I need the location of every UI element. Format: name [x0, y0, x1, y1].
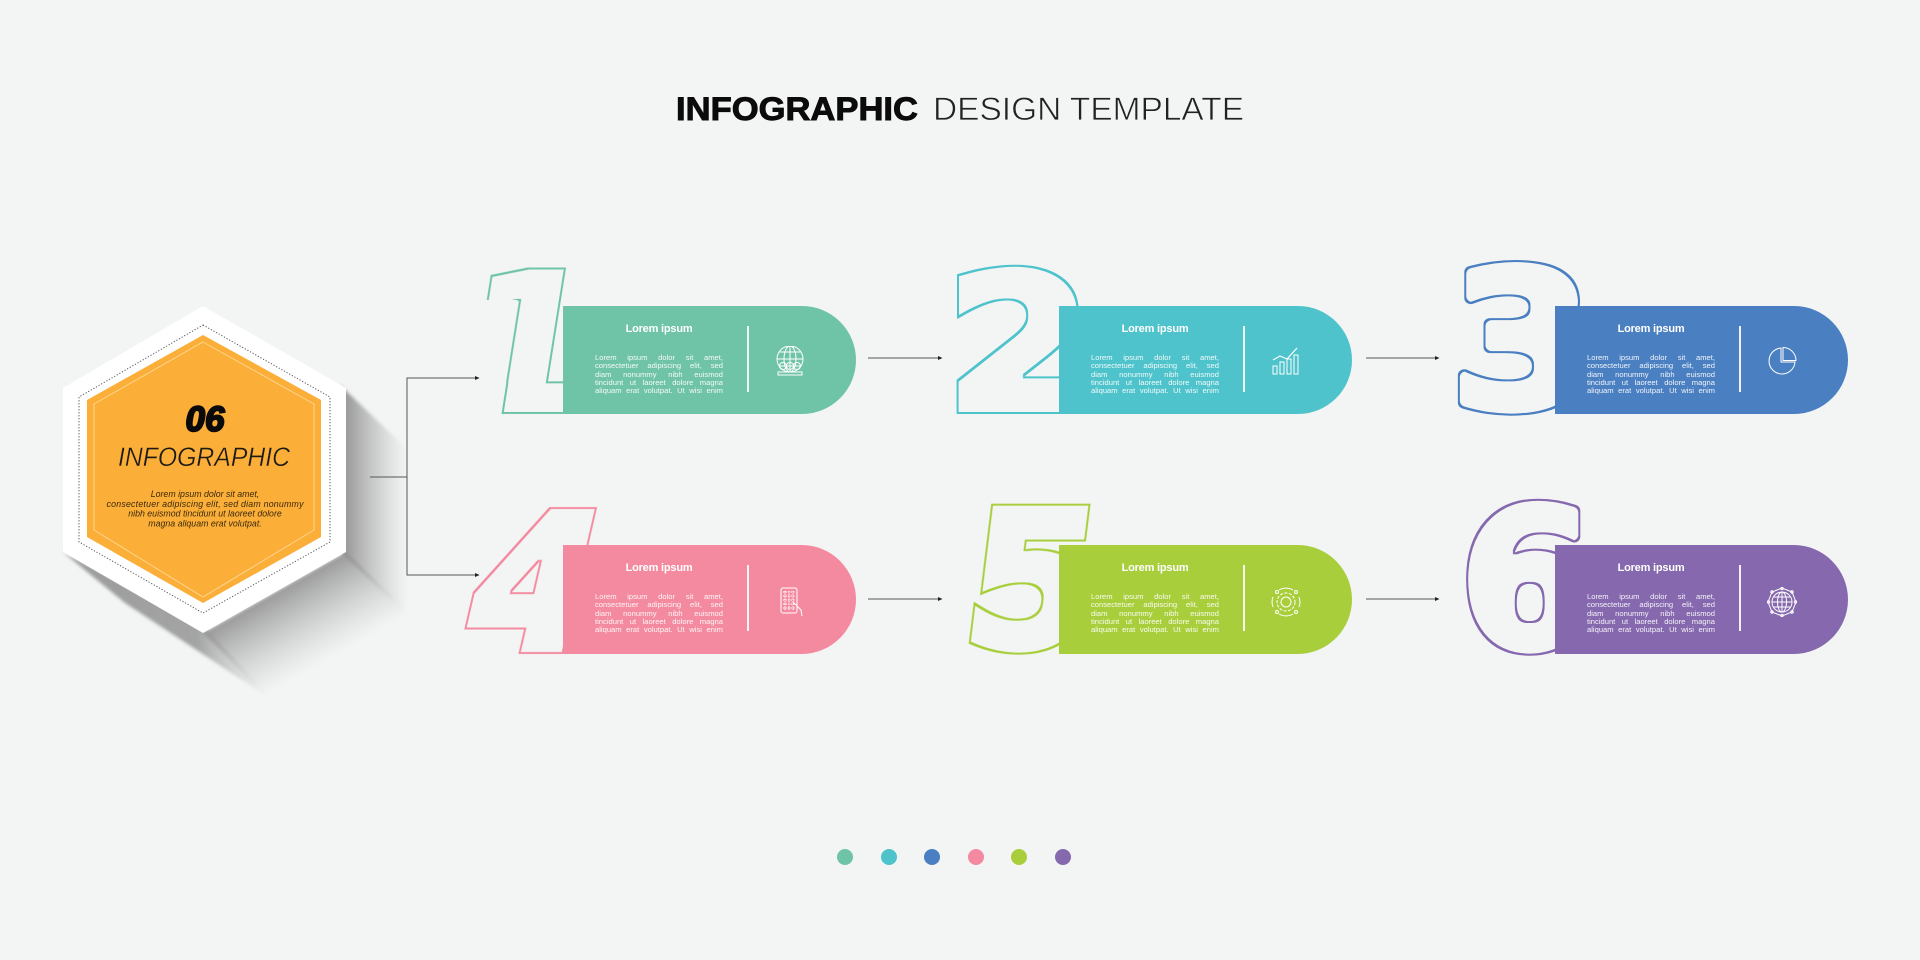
panel: step 4: consectetuer adipiscing elit, sed: [595, 600, 723, 609]
panel: step 2: [947, 238, 1352, 452]
badge description: [106, 489, 304, 528]
badge number: 06: [186, 400, 225, 439]
panel: step 6: tincidunt ut laoreet dolore magna: [1587, 617, 1715, 626]
panel: step 1: Lorem ipsum: [626, 323, 692, 335]
panel: step 5: 5: [954, 474, 1111, 691]
panel: step 2: 2: [947, 238, 1091, 452]
arrow 1 to 2: [868, 356, 942, 360]
panel: step 2: aliquam erat volutpat. Ut wisi enim: [1091, 386, 1219, 395]
panel: step 5: Lorem ipsum dolor sit amet,: [1091, 592, 1219, 601]
panel: step 4: diam nonummy nibh euismod: [595, 609, 723, 618]
panel: step 4: [447, 477, 856, 692]
arrow 2 to 3: [1366, 356, 1440, 360]
panel: step 3: Lorem ipsum: [1618, 323, 1684, 335]
panel: step 4: tincidunt ut laoreet dolore magna: [595, 617, 723, 626]
panel: step 2: diam nonummy nibh euismod: [1091, 370, 1219, 379]
panel: step 3: Lorem ipsum dolor sit amet,: [1587, 353, 1715, 362]
panel: step 3: [1451, 230, 1848, 452]
panel: step 4: aliquam erat volutpat. Ut wisi enim: [595, 625, 723, 634]
panel: step 1: diam nonummy nibh euismod: [595, 370, 723, 379]
panel: step 6: Lorem ipsum: [1618, 562, 1684, 574]
badge description: nibh euismod tincidunt ut laoreet dolore: [128, 508, 282, 518]
title: [676, 91, 1244, 127]
panel: step 5: Lorem ipsum: [1122, 562, 1188, 574]
badge heading: INFOGRAPHIC: [118, 442, 290, 472]
panel: step 5: consectetuer adipiscing elit, sed: [1091, 600, 1219, 609]
panel: step 5: [954, 474, 1352, 691]
panel: step 1: 1: [445, 235, 612, 456]
panel: step 2: Lorem ipsum dolor sit amet,: [1091, 353, 1219, 362]
panel: step 3: tincidunt ut laoreet dolore magna: [1587, 378, 1715, 387]
title: DESIGN TEMPLATE: [933, 91, 1244, 127]
panel: step 1: aliquam erat volutpat. Ut wisi enim: [595, 386, 723, 395]
hexagon long shadow: [63, 385, 408, 697]
badge description: Lorem ipsum dolor sit amet,: [151, 489, 259, 499]
panel: step 1: consectetuer adipiscing elit, sed: [595, 361, 723, 370]
legend dots: [837, 849, 1071, 865]
panel: step 4: Lorem ipsum: [626, 562, 692, 574]
panel: step 6: Lorem ipsum dolor sit amet,: [1587, 592, 1715, 601]
panel: step 1: tincidunt ut laoreet dolore magna: [595, 378, 723, 387]
arrow 4 to 5: [868, 597, 942, 601]
panel: step 4: Lorem ipsum dolor sit amet,: [595, 592, 723, 601]
panel: step 3: 3: [1451, 230, 1593, 452]
hexagon: central badge: [63, 306, 346, 633]
panel: step 3: consectetuer adipiscing elit, sed: [1587, 361, 1715, 370]
connector: hexagon to rows: [370, 376, 480, 577]
panel: step 2: tincidunt ut laoreet dolore magna: [1091, 378, 1219, 387]
badge description: consectetuer adipiscing elit, sed diam nonummy: [106, 499, 304, 509]
panel: step 3: diam nonummy nibh euismod: [1587, 370, 1715, 379]
title: INFOGRAPHIC: [676, 91, 918, 127]
panel: step 5: aliquam erat volutpat. Ut wisi enim: [1091, 625, 1219, 634]
panel: step 5: diam nonummy nibh euismod: [1091, 609, 1219, 618]
panel: step 6: 6: [1460, 470, 1594, 693]
badge description: magna aliquam erat volutpat.: [148, 518, 262, 528]
panel: step 6: consectetuer adipiscing elit, sed: [1587, 600, 1715, 609]
panel: step 3: aliquam erat volutpat. Ut wisi enim: [1587, 386, 1715, 395]
panel: step 6: diam nonummy nibh euismod: [1587, 609, 1715, 618]
panel: step 5: tincidunt ut laoreet dolore magna: [1091, 617, 1219, 626]
panel: step 2: Lorem ipsum: [1122, 323, 1188, 335]
panel: step 6: [1460, 470, 1848, 693]
panel: step 1: [486, 267, 856, 414]
panel: step 2: consectetuer adipiscing elit, sed: [1091, 361, 1219, 370]
arrow 5 to 6: [1366, 597, 1440, 601]
panel: step 1: Lorem ipsum dolor sit amet,: [595, 353, 723, 362]
panel: step 4: 4: [447, 477, 626, 692]
panel: step 6: aliquam erat volutpat. Ut wisi enim: [1587, 625, 1715, 634]
